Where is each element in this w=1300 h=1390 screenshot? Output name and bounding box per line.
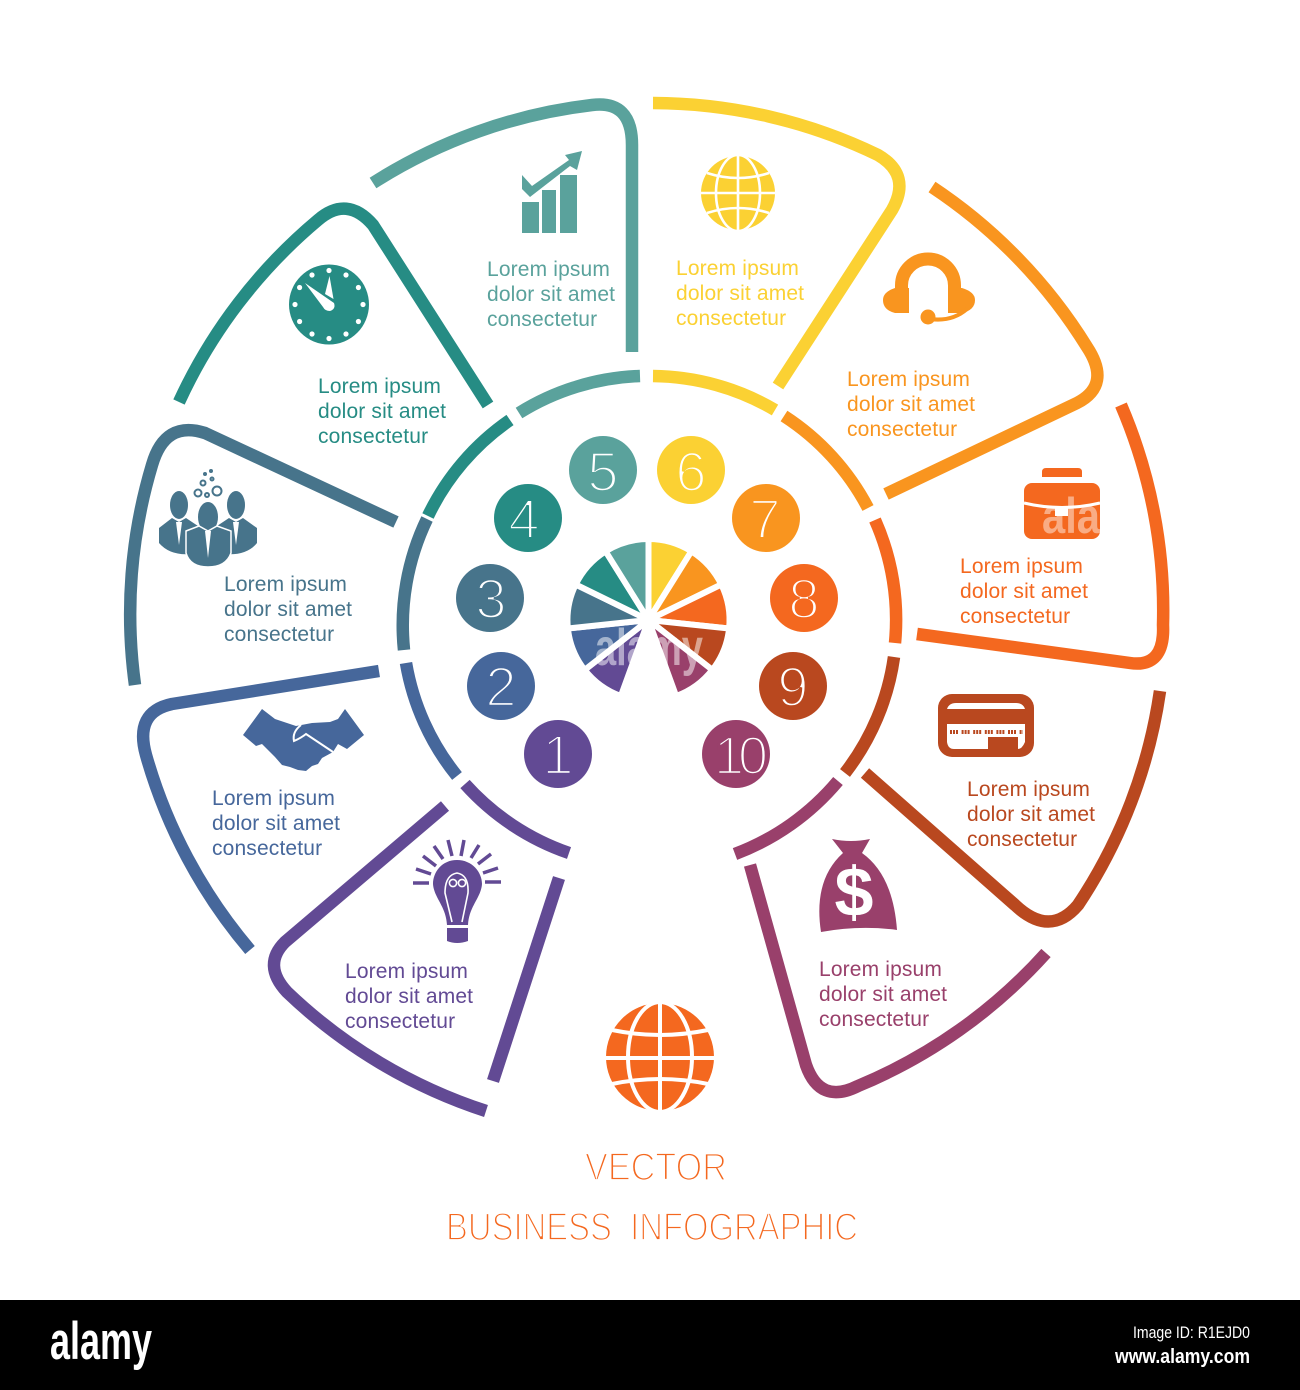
text: segment 6: Lorem ipsum bbox=[676, 257, 799, 280]
text: segment 6: dolor sit amet bbox=[676, 282, 804, 305]
number 2: 2 bbox=[485, 655, 517, 718]
outline segment 9 bbox=[845, 657, 1160, 922]
icon: credit card bbox=[938, 694, 1034, 757]
text: segment 7: dolor sit amet bbox=[847, 393, 975, 416]
icon: headset bbox=[883, 259, 975, 324]
text: segment 8: Lorem ipsum bbox=[960, 555, 1083, 578]
footer url: www.alamy.com bbox=[1114, 1346, 1250, 1368]
text: segment 9: Lorem ipsum bbox=[967, 778, 1090, 801]
outline segment 5 bbox=[373, 104, 640, 413]
number 8: 8 bbox=[788, 567, 820, 630]
panel: segment 6 yellow bbox=[653, 103, 899, 410]
text: segment 8: consectetur bbox=[960, 605, 1070, 628]
panel: segment 5 sea green bbox=[373, 104, 640, 413]
number 5: 5 bbox=[587, 440, 619, 503]
footer bar bbox=[0, 1300, 1300, 1390]
panel: segment 2 blue bbox=[143, 663, 457, 950]
number 2 bbox=[467, 652, 535, 720]
number 3: 3 bbox=[475, 567, 507, 630]
outline segment 10 bbox=[735, 781, 1046, 1092]
text: segment 10: consectetur bbox=[819, 1008, 929, 1031]
text: segment 4: dolor sit amet bbox=[318, 400, 446, 423]
number 10 bbox=[702, 720, 770, 788]
panel: segment 1 purple bbox=[274, 784, 569, 1111]
icon: globe bbox=[700, 155, 776, 231]
number 6 bbox=[657, 436, 725, 504]
number 3 bbox=[456, 564, 524, 632]
text: segment 2: Lorem ipsum bbox=[212, 787, 335, 810]
text: segment 6: consectetur bbox=[676, 307, 786, 330]
number 1 bbox=[524, 720, 592, 788]
number 9 bbox=[759, 652, 827, 720]
icon: money bag: $ bbox=[835, 853, 873, 931]
outline segment 2 bbox=[143, 663, 457, 950]
number 8 bbox=[770, 564, 838, 632]
outline segment 3 bbox=[130, 430, 427, 685]
watermark on pie: alamy bbox=[595, 619, 703, 677]
panel: segment 10 magenta bbox=[735, 781, 1046, 1092]
text: segment 1: Lorem ipsum bbox=[345, 960, 468, 983]
outline segment 1 bbox=[274, 784, 569, 1111]
icon: business team bbox=[159, 470, 257, 567]
text: segment 5: consectetur bbox=[487, 308, 597, 331]
number 7: 7 bbox=[749, 487, 781, 550]
outline segment 7 bbox=[784, 187, 1097, 508]
text: segment 4: consectetur bbox=[318, 425, 428, 448]
text: segment 9: dolor sit amet bbox=[967, 803, 1095, 826]
text: segment 7: Lorem ipsum bbox=[847, 368, 970, 391]
footer image id: Image ID: R1EJD0 bbox=[1133, 1323, 1250, 1342]
text: segment 8: dolor sit amet bbox=[960, 580, 1088, 603]
text: segment 5: dolor sit amet bbox=[487, 283, 615, 306]
outline segment 6 bbox=[653, 103, 899, 410]
title line 2: BUSINESS INFOGRAPHIC bbox=[446, 1206, 858, 1249]
panel: segment 7 orange bbox=[784, 187, 1097, 508]
text: segment 1: dolor sit amet bbox=[345, 985, 473, 1008]
text: segment 3: Lorem ipsum bbox=[224, 573, 347, 596]
text: segment 3: consectetur bbox=[224, 623, 334, 646]
text: segment 10: Lorem ipsum bbox=[819, 958, 942, 981]
number circles bbox=[456, 436, 838, 788]
text: segment 2: consectetur bbox=[212, 837, 322, 860]
text: segment 5: Lorem ipsum bbox=[487, 258, 610, 281]
text: segment 3: dolor sit amet bbox=[224, 598, 352, 621]
panel: segment 8 red-orange bbox=[875, 405, 1163, 664]
number 5 bbox=[569, 436, 637, 504]
outline segment 4 bbox=[179, 209, 510, 516]
number 6: 6 bbox=[675, 440, 707, 503]
panel: segment 3 slate bbox=[130, 430, 427, 685]
title bbox=[446, 1146, 858, 1249]
central pie chart bbox=[567, 539, 730, 696]
text: segment 2: dolor sit amet bbox=[212, 812, 340, 835]
icon: briefcase bbox=[1024, 468, 1101, 544]
number 10: 10 bbox=[714, 726, 766, 786]
number 4: 4 bbox=[508, 487, 540, 550]
number 4 bbox=[494, 484, 562, 552]
panel: segment 9 brown-red bbox=[845, 657, 1160, 922]
panel: segment 4 teal bbox=[179, 209, 510, 516]
text: segment 7: consectetur bbox=[847, 418, 957, 441]
icon: money bag bbox=[819, 839, 897, 932]
text: segment 1: consectetur bbox=[345, 1010, 455, 1033]
number 1: 1 bbox=[542, 723, 574, 786]
outline segment 8 bbox=[875, 405, 1163, 664]
icon: light bulb bbox=[413, 840, 501, 943]
icon: rising chart bbox=[522, 151, 582, 233]
footer logo: alamy bbox=[50, 1312, 152, 1371]
number 7 bbox=[732, 484, 800, 552]
icon: clock bbox=[289, 264, 369, 344]
icon: handshake bbox=[243, 709, 364, 771]
icon: briefcase: ala bbox=[1042, 488, 1101, 544]
text: segment 10: dolor sit amet bbox=[819, 983, 947, 1006]
number 9: 9 bbox=[777, 655, 809, 718]
text: segment 4: Lorem ipsum bbox=[318, 375, 441, 398]
title line 1: VECTOR bbox=[585, 1146, 727, 1189]
text: segment 9: consectetur bbox=[967, 828, 1077, 851]
icon: bottom globe bbox=[605, 1002, 715, 1112]
